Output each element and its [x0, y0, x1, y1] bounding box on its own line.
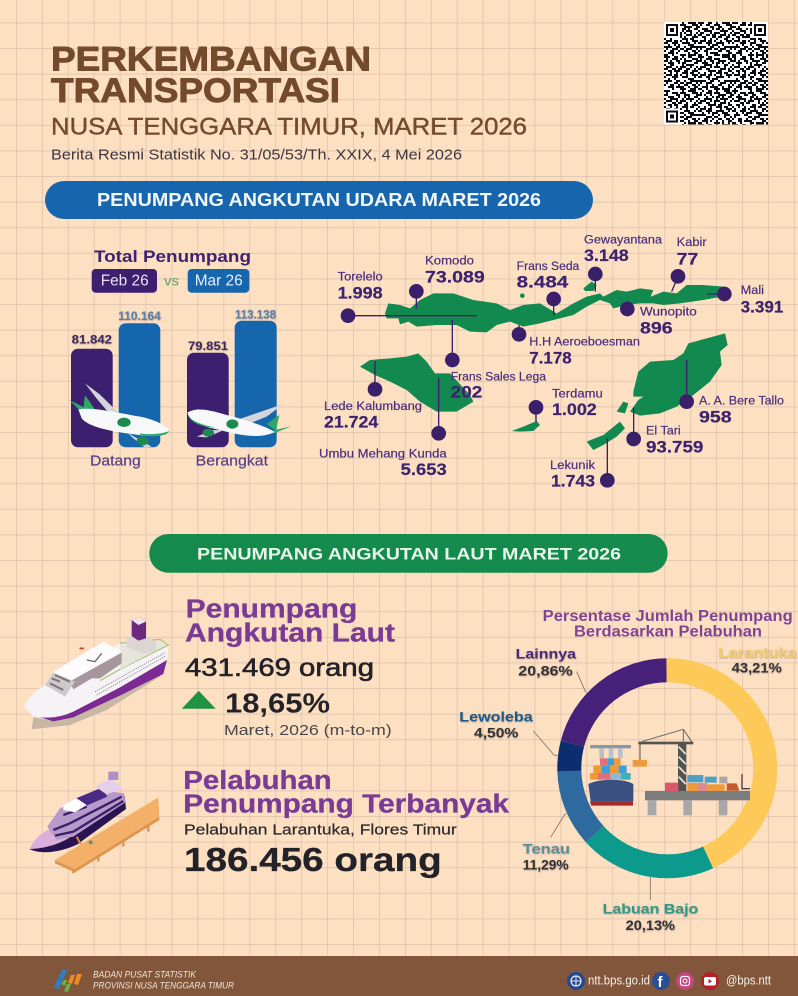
QR code: [664, 22, 768, 124]
panel: passenger share by port: [459, 608, 797, 933]
icon: facebook: f: [658, 974, 664, 991]
map labels: [319, 234, 784, 491]
bars: Datang: Datang: [90, 453, 141, 469]
panel: total passengers bar chart: [69, 247, 292, 469]
title line 2: TRANSPORTASI: [51, 72, 340, 110]
map labels: Mali: [741, 285, 764, 297]
map labels: Frans Seda: [517, 261, 580, 273]
map labels: 896: [640, 319, 673, 337]
heading: air passengers: [45, 181, 593, 219]
port total: 186.456 orang: [184, 842, 442, 879]
icon: cruise ship: [24, 617, 168, 729]
leader lines: [533, 672, 650, 900]
growth value: 18,65%: [225, 688, 330, 719]
social handle: @bps.ntt: [726, 974, 771, 988]
bars: Berangkat: [187, 308, 277, 469]
donut labels: 20,86%: [518, 662, 573, 678]
icon: instagram: [676, 972, 694, 990]
chart title: Total Penumpang: [94, 247, 251, 266]
icon: up triangle: [182, 691, 216, 709]
agency name: BADAN PUSAT STATISTIK: [93, 970, 197, 981]
port heading: Penumpang Terbanyak: [183, 791, 510, 819]
map labels: 93.759: [646, 438, 703, 456]
map labels: El Tari: [646, 425, 681, 437]
title line 1: PERKEMBANGAN: [51, 40, 371, 78]
sea heading: Penumpang: [186, 595, 357, 623]
heading: sea passengers: PENUMPANG ANGKUTAN LAUT MARET 2026: [197, 544, 621, 563]
bars: Datang: 81.842: [72, 332, 112, 346]
map labels: Torelelo: [338, 272, 383, 284]
port name: Pelabuhan Larantuka, Flores Timur: [184, 821, 457, 838]
map labels: Gewayantana: [584, 234, 663, 246]
bars: Berangkat: Berangkat: [196, 453, 268, 469]
map: islands of NTT: [360, 282, 728, 450]
map labels: Lekunik: [550, 460, 595, 472]
footer: [0, 956, 798, 996]
panel: sea passenger total: [24, 595, 396, 739]
bars: Datang: [71, 309, 161, 469]
heading: sea passengers: [149, 534, 668, 573]
icon: facebook: [652, 972, 670, 991]
map labels: 3.391: [741, 298, 783, 316]
donut labels: Labuan Bajo: [603, 900, 698, 916]
map labels: 77: [677, 250, 698, 268]
title block: [51, 40, 527, 164]
donut labels: Lewoleba: [459, 709, 533, 725]
sea heading: Angkutan Laut: [185, 620, 396, 648]
map labels: 1.002: [552, 401, 597, 419]
map labels: Frans Sales Lega: [451, 371, 547, 383]
logo: BPS: [54, 970, 82, 992]
icon: landing plane: [69, 383, 169, 448]
donut labels: 4,50%: [474, 725, 519, 741]
icon: departing plane: [187, 404, 292, 437]
map labels: Wunopito: [640, 307, 697, 319]
map pins and leader lines: [341, 267, 731, 487]
icon: youtube: [701, 972, 719, 990]
legend: Mar 26: [195, 272, 243, 290]
release reference: Berita Resmi Statistik No. 31/05/53/Th. XXIX, 4 Mei 2026: [51, 146, 462, 164]
donut labels: Larantuka: [718, 644, 797, 660]
website address: ntt.bps.go.id: [588, 974, 650, 988]
map labels: Lede Kalumbang: [324, 401, 422, 413]
port heading: [183, 767, 510, 819]
map labels: Kabir: [677, 237, 707, 249]
map labels: 3.148: [584, 247, 629, 265]
map labels: 8.484: [517, 274, 569, 292]
heading: air passengers: PENUMPANG ANGKUTAN UDARA MARET 2026: [97, 190, 541, 210]
map labels: Umbu Mehang Kunda: [319, 448, 447, 460]
map labels: 1.998: [338, 284, 383, 302]
map labels: 7.178: [529, 349, 572, 367]
chart title: Persentase Jumlah Penumpang: [543, 608, 793, 625]
donut labels: Lainnya: [516, 646, 576, 662]
port heading: Pelabuhan: [183, 767, 332, 795]
legend: Feb 26: [101, 272, 149, 290]
donut labels: 43,21%: [732, 660, 782, 676]
map labels: 21.724: [324, 413, 379, 431]
donut chart: [569, 670, 765, 866]
donut labels: Tenau: [523, 840, 570, 856]
map labels: 1.743: [551, 473, 595, 491]
map labels: 202: [451, 384, 482, 402]
donut labels: 11,29%: [523, 856, 569, 872]
agency name: [93, 970, 234, 991]
map labels: A. A. Bere Tallo: [699, 395, 784, 407]
legend: [92, 269, 249, 293]
icon: container port: [588, 729, 750, 815]
bars: Berangkat: 79.851: [188, 339, 228, 353]
sea heading: [185, 595, 396, 648]
map labels: 5.653: [401, 461, 447, 479]
map labels: 73.089: [425, 268, 485, 286]
donut labels: [459, 644, 797, 933]
panel: busiest port: [29, 767, 510, 879]
legend: vs: [164, 272, 179, 288]
chart title: [543, 608, 793, 641]
map labels: H.H Aeroeboesman: [529, 337, 640, 349]
donut labels: 20,13%: [626, 917, 676, 933]
agency name: PROVINSI NUSA TENGGARA TIMUR: [93, 980, 234, 991]
panel: airport map: [319, 234, 784, 491]
total passengers: 431.469 orang: [185, 654, 374, 682]
icon: website: [567, 972, 585, 990]
icon: ship at dock: [29, 772, 159, 873]
map labels: 958: [699, 408, 732, 426]
map labels: Terdamu: [552, 388, 603, 400]
chart title: Berdasarkan Pelabuhan: [574, 624, 762, 641]
map labels: Komodo: [425, 255, 474, 267]
bars: Berangkat: 113.138: [235, 308, 276, 322]
subtitle: NUSA TENGGARA TIMUR, MARET 2026: [51, 114, 527, 140]
growth period: Maret, 2026 (m-to-m): [224, 723, 392, 739]
bars: Datang: 110.164: [118, 309, 161, 323]
